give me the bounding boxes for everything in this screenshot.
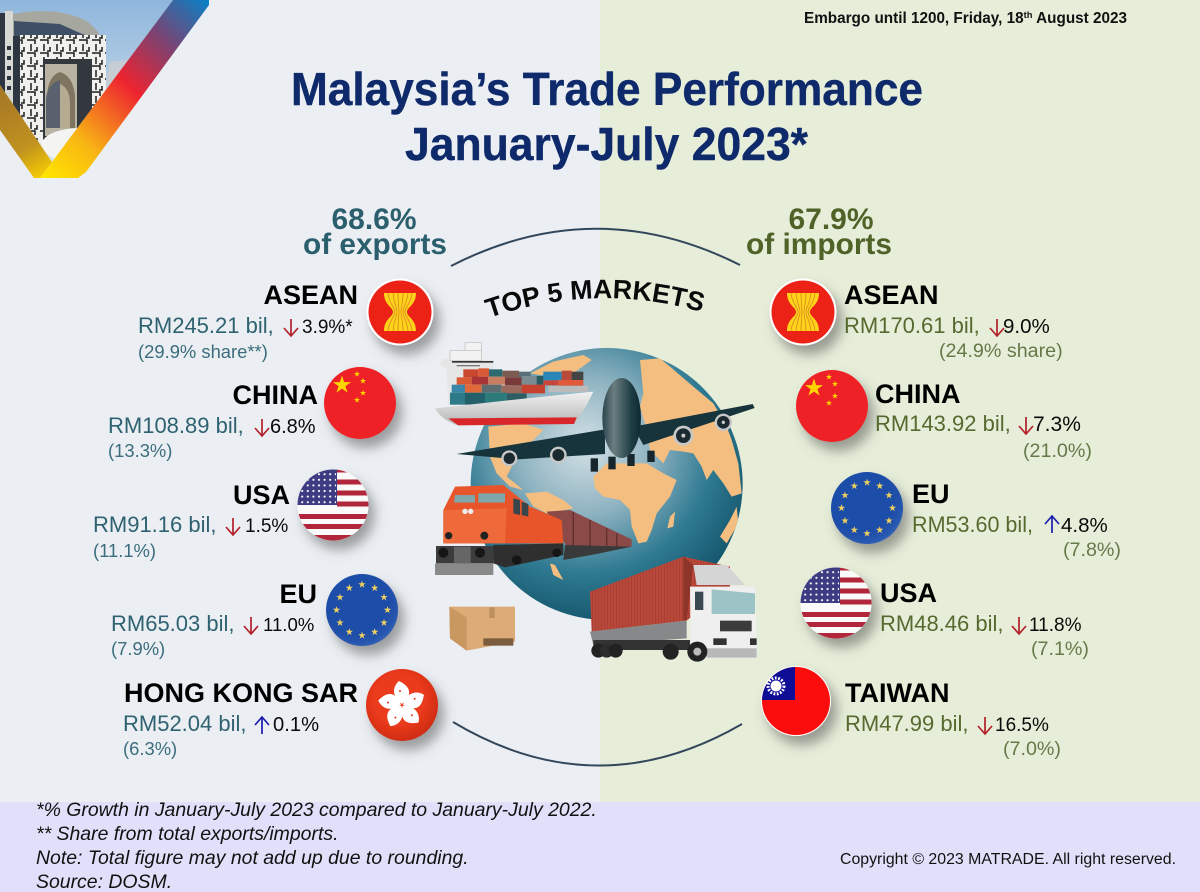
market: Taiwan imports: RM47.99 bil, — [845, 711, 969, 736]
market: Taiwan imports — [761, 666, 1061, 760]
curved label: top 5 markets: TOP 5 MARKETS — [484, 280, 704, 316]
market: USA exports: USA — [233, 480, 290, 510]
market: ASEAN imports — [770, 278, 1063, 362]
flag: USA — [800, 566, 872, 639]
market: Taiwan imports: (7.0%) — [1003, 738, 1061, 760]
market: China exports: 6.8% — [270, 416, 316, 438]
embargo note: August 2023 — [1032, 10, 1127, 27]
flag: EU — [831, 472, 903, 544]
market: USA exports — [93, 468, 369, 561]
flag: USA — [297, 468, 369, 541]
footnotes: ** Share from total exports/imports. — [36, 823, 338, 845]
market: EU exports: 11.0% — [263, 614, 314, 635]
top arc — [451, 229, 740, 266]
market: Taiwan imports: 16.5% — [995, 715, 1049, 736]
imports share heading — [746, 203, 892, 261]
exports share heading — [303, 203, 447, 261]
flag: EU — [326, 574, 398, 646]
imports share heading: of imports — [746, 228, 892, 261]
market: EU imports: RM53.60 bil, — [912, 512, 1033, 537]
market: ASEAN imports: (24.9% share) — [939, 340, 1063, 362]
market: EU exports: (7.9%) — [111, 638, 165, 659]
market: ASEAN imports: 9.0% — [1003, 315, 1050, 338]
flag: China — [796, 370, 868, 442]
central illustration: global trade — [435, 343, 757, 662]
market: China exports: RM108.89 bil, — [108, 413, 244, 438]
market: Hong Kong exports: HONG KONG SAR — [124, 678, 358, 708]
market: USA imports — [800, 566, 1089, 660]
market: ASEAN exports: RM245.21 bil, — [138, 313, 274, 338]
market: EU exports — [111, 574, 398, 659]
market: EU imports: (7.8%) — [1063, 539, 1121, 561]
market: China imports — [796, 370, 1092, 462]
market: ASEAN exports: (29.9% share**) — [138, 341, 268, 362]
title: January-July 2023* — [405, 118, 808, 170]
footnotes — [36, 799, 597, 892]
embargo note: Embargo until 1200, Friday, 18 — [804, 10, 1027, 27]
market: Hong Kong exports — [123, 669, 438, 759]
market: USA imports: RM48.46 bil, — [880, 611, 1004, 636]
market: China exports: (13.3%) — [108, 440, 172, 461]
background: imports side — [600, 0, 1200, 802]
flag: Hong Kong — [366, 669, 438, 741]
imports share heading: 67.9% — [788, 203, 874, 236]
market: Hong Kong exports: (6.3%) — [123, 738, 177, 759]
title: Malaysia’s Trade Performance — [291, 63, 923, 115]
market: Hong Kong exports: 0.1% — [273, 714, 319, 736]
market: China exports: CHINA — [232, 380, 318, 410]
flag: China — [324, 367, 396, 439]
market: USA exports: 1.5% — [245, 516, 288, 537]
footnotes: Note: Total figure may not add up due to rounding. — [36, 847, 469, 869]
market: USA imports: (7.1%) — [1031, 638, 1089, 660]
copyright: Copyright © 2023 MATRADE. All right reserved. — [840, 851, 1176, 868]
flag: ASEAN — [770, 278, 836, 346]
market: EU imports: 4.8% — [1061, 514, 1108, 537]
background: exports side — [0, 0, 600, 802]
market: USA imports: 11.8% — [1029, 615, 1082, 636]
market: ASEAN imports: ASEAN — [844, 280, 939, 310]
cargo ship — [435, 343, 593, 425]
market: ASEAN exports: 3.9%* — [302, 317, 353, 338]
embargo note: th — [1024, 10, 1033, 21]
market: USA imports: USA — [880, 578, 937, 608]
market: USA exports: (11.1%) — [93, 540, 156, 561]
market: Taiwan imports: TAIWAN — [845, 678, 949, 708]
market: China imports: CHINA — [875, 379, 960, 409]
market: ASEAN exports — [138, 278, 434, 362]
container truck — [590, 557, 757, 662]
flag: ASEAN — [366, 278, 434, 346]
title — [291, 63, 923, 170]
market: China exports — [108, 367, 396, 461]
train — [435, 485, 632, 575]
exports share heading: 68.6% — [331, 203, 417, 236]
market: Hong Kong exports: RM52.04 bil, — [123, 711, 247, 736]
exports share heading: of exports — [303, 228, 447, 261]
cardboard box — [449, 607, 515, 651]
logo: building photo and ribbon — [0, 0, 209, 178]
market: USA exports: RM91.16 bil, — [93, 512, 217, 537]
plane — [457, 378, 755, 472]
market: EU exports: EU — [279, 579, 317, 609]
market: EU exports: RM65.03 bil, — [111, 611, 235, 636]
market: China imports: 7.3% — [1033, 413, 1081, 436]
market: China imports: RM143.92 bil, — [875, 411, 1011, 436]
background: footer band — [0, 802, 1200, 892]
market: China imports: (21.0%) — [1023, 440, 1092, 462]
market: ASEAN exports: ASEAN — [263, 280, 358, 310]
flag: Taiwan — [761, 666, 831, 736]
footnotes: *% Growth in January-July 2023 compared to January-July 2022. — [36, 799, 597, 821]
market: ASEAN imports: RM170.61 bil, — [844, 313, 980, 338]
bottom arc — [453, 722, 742, 766]
market: EU imports: EU — [912, 479, 950, 509]
market: EU imports — [831, 472, 1121, 561]
globe — [471, 348, 743, 620]
